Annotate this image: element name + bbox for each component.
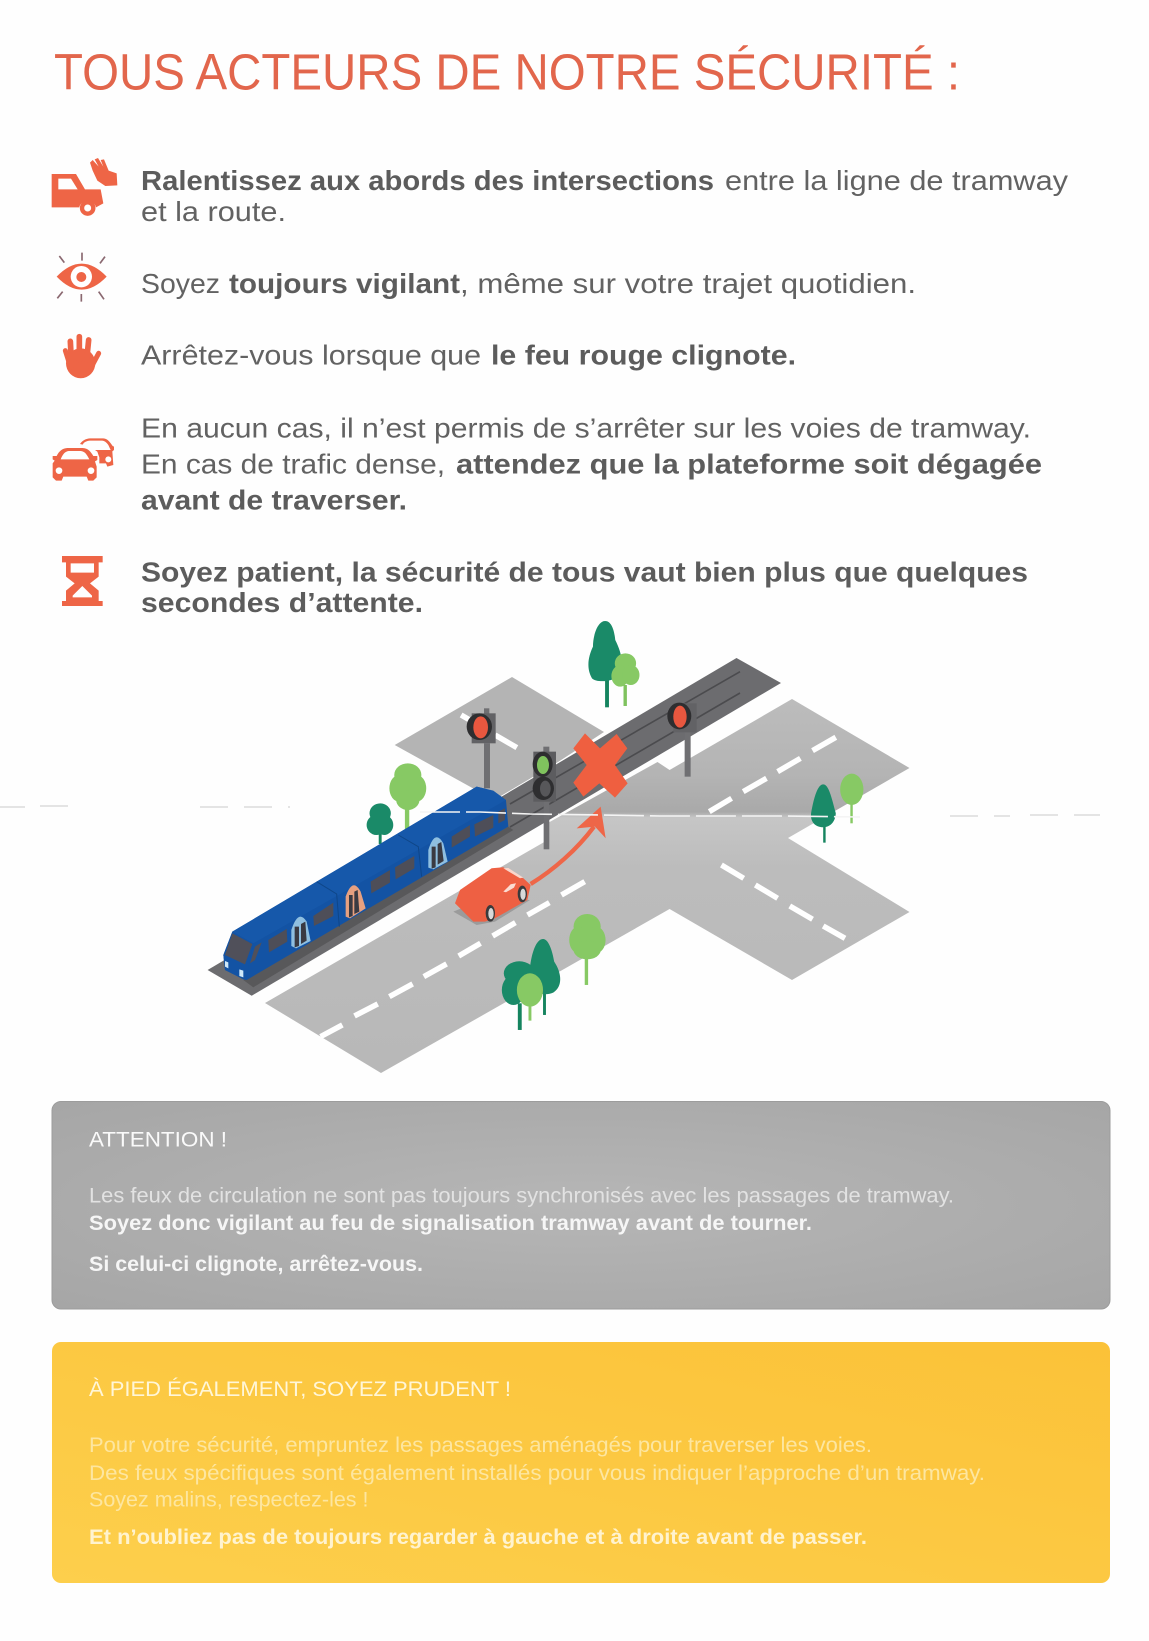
illustration: intersection scene — [208, 621, 910, 1073]
text: stop on flashing red: Arrêtez-vous lorsque que — [141, 340, 481, 370]
tram doors — [291, 837, 448, 948]
tree: left pair — [367, 763, 426, 844]
title: TOUS ACTEURS DE NOTRE SÉCURITÉ : — [54, 44, 960, 100]
text: vigilant: toujours vigilant — [229, 268, 460, 299]
text: do not stop on tracks: attendez que la plateforme soit dégagée — [456, 448, 1042, 480]
panel text: pedestrians: Soyez malins, respectez-les ! — [89, 1488, 368, 1512]
text: do not stop on tracks — [141, 412, 1042, 516]
panel text: pedestrians — [89, 1434, 985, 1549]
panel text: pedestrians: Pour votre sécurité, empruntez les passages aménagés pour traverser les voies. — [89, 1434, 872, 1457]
red cross — [573, 733, 628, 798]
icon: truck and waving hand — [52, 158, 117, 214]
tree: right pair — [811, 774, 863, 843]
traffic light: right red — [667, 703, 697, 777]
text: slow down: entre la ligne de tramway — [725, 165, 1068, 196]
tree: top pair — [588, 621, 639, 707]
main road surface — [265, 699, 910, 1073]
icon: two cars in traffic — [53, 438, 114, 481]
text: do not stop on tracks: En aucun cas, il n’est permis de s’arrêter sur les voies de tramway. — [141, 412, 1031, 444]
tramway track — [208, 658, 781, 996]
text: do not stop on tracks: En cas de trafic dense, — [141, 448, 445, 480]
text: be patient: secondes d’attente. — [141, 587, 423, 618]
panel text: attention — [89, 1184, 954, 1276]
text: slow down: Ralentissez aux abords des intersections — [141, 165, 714, 196]
tramway — [223, 787, 513, 987]
text: be patient — [141, 556, 1028, 618]
panel text: attention: Soyez donc vigilant au feu de signalisation tramway avant de tourner. — [89, 1212, 812, 1235]
tree: bottom group — [502, 914, 606, 1030]
panel heading: attention: ATTENTION ! — [89, 1128, 227, 1152]
arrow: car turning across tracks — [531, 807, 606, 884]
text: vigilant — [141, 268, 916, 299]
text: vigilant: , même sur votre trajet quotidien. — [460, 268, 916, 299]
icon: hourglass — [62, 556, 103, 606]
fold crease — [0, 806, 1100, 817]
red car — [453, 867, 531, 925]
panel text: attention: Les feux de circulation ne sont pas toujours synchronisés avec les passages de tramway. — [89, 1184, 954, 1208]
icon: stop hand — [65, 337, 99, 378]
upper-left road block — [395, 677, 604, 800]
text: slow down — [141, 165, 1068, 227]
panel: pedestrians — [52, 1342, 1110, 1583]
text: be patient: Soyez patient, la sécurité de tous vaut bien plus que quelques — [141, 556, 1028, 588]
text: vigilant: Soyez — [141, 268, 220, 299]
traffic light: left red — [467, 708, 496, 788]
panel text: pedestrians: Et n’oubliez pas de toujours regarder à gauche et à droite avant de passer. — [89, 1526, 867, 1549]
text: slow down: et la route. — [141, 196, 286, 227]
text: stop on flashing red: le feu rouge clignote. — [491, 340, 796, 370]
traffic light: tram signal — [533, 747, 556, 849]
text: do not stop on tracks: avant de traverser. — [141, 484, 407, 516]
panel text: pedestrians: Des feux spécifiques sont également installés pour vous indiquer l’approche d’un tramway. — [89, 1462, 985, 1485]
panel text: attention: Si celui-ci clignote, arrêtez-vous. — [89, 1253, 423, 1276]
icon: eye — [57, 253, 107, 302]
traffic lights — [453, 703, 697, 925]
panel: attention — [52, 1102, 1110, 1309]
text: stop on flashing red — [141, 340, 796, 370]
road dashes — [321, 715, 845, 1037]
panel heading: pedestrians: À PIED ÉGALEMENT, SOYEZ PRUDENT ! — [89, 1378, 511, 1401]
